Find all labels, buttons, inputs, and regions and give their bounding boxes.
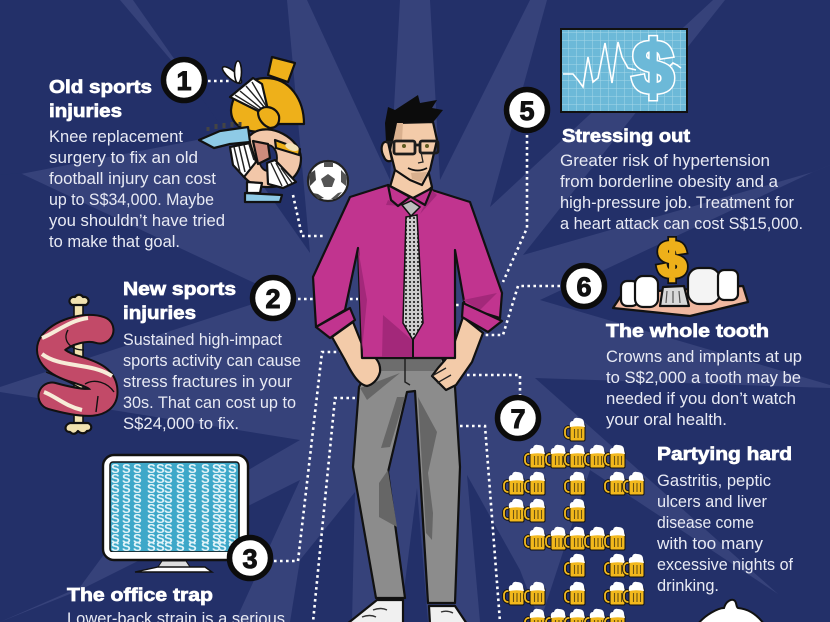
neck bbox=[390, 170, 432, 202]
number badge 3 bbox=[230, 538, 270, 578]
body: old sports injuries: surgery to fix an old bbox=[49, 149, 198, 167]
icon: white shape at bottom edge bbox=[698, 600, 764, 622]
number badge 6 bbox=[564, 266, 604, 306]
heading: stressing out: Stressing out bbox=[562, 126, 690, 146]
number badge 2: 2 bbox=[265, 284, 281, 314]
body: stressing out: a heart attack can cost S$15,000. bbox=[560, 215, 803, 233]
icon: computer monitor of dollar signs: SSSSSSSSSSSS bbox=[111, 461, 237, 476]
number badge 3: 3 bbox=[242, 544, 258, 574]
number badge 7: 7 bbox=[510, 404, 526, 434]
icon: computer monitor of dollar signs: SSSSSSSSSSSS bbox=[111, 471, 237, 486]
icon: computer monitor of dollar signs: SSSSSSSSSSSS bbox=[111, 511, 237, 526]
icon: computer monitor of dollar signs: SSSSSSSSSSSS bbox=[111, 491, 237, 506]
number badge 1: 1 bbox=[176, 66, 192, 96]
body: partying hard: Gastritis, peptic bbox=[657, 472, 771, 490]
text block: the whole tooth bbox=[606, 321, 802, 429]
icon: teeth with gold dollar sign bbox=[613, 232, 748, 316]
body: stressing out: high-pressure job. Treatment for bbox=[560, 194, 795, 212]
text block: old sports injuries bbox=[49, 77, 225, 251]
body: partying hard: ulcers and liver bbox=[657, 493, 767, 511]
body: stressing out: from borderline obesity and a bbox=[560, 173, 779, 191]
text block: the office trap bbox=[67, 585, 285, 622]
number badge 6: 6 bbox=[576, 272, 592, 302]
heading: the whole tooth: The whole tooth bbox=[606, 321, 769, 341]
number badge 5: 5 bbox=[519, 96, 535, 126]
body: the whole tooth: your oral health. bbox=[606, 411, 727, 429]
body: partying hard: with too many bbox=[656, 535, 764, 553]
icon: ECG screen with dollar sign: $ bbox=[632, 26, 674, 109]
head bbox=[382, 95, 443, 185]
icon: teeth with gold dollar sign: $ bbox=[658, 232, 686, 288]
body: new sports injuries: stress fractures in your bbox=[123, 373, 293, 391]
icon: teeth with gold dollar sign: $ bbox=[658, 232, 686, 288]
body: old sports injuries: Knee replacement bbox=[49, 128, 183, 146]
body: new sports injuries: Sustained high-impact bbox=[123, 331, 282, 349]
body: partying hard: drinking. bbox=[657, 577, 719, 595]
number badge 1 bbox=[164, 60, 204, 100]
body: old sports injuries: up to S$34,000. Maybe bbox=[49, 191, 214, 209]
icon: ECG screen with dollar sign: $ bbox=[632, 26, 674, 109]
icon: computer monitor of dollar signs: SSSSSSSSSSSS bbox=[111, 539, 237, 554]
man figure bbox=[313, 95, 502, 622]
text block: partying hard bbox=[656, 444, 793, 595]
body: old sports injuries: to make that goal. bbox=[49, 233, 180, 251]
number badge 5 bbox=[506, 90, 548, 130]
shirt bbox=[313, 185, 502, 358]
body: old sports injuries: football injury can cost bbox=[49, 170, 216, 188]
body: old sports injuries: you shouldn’t have tried bbox=[49, 212, 225, 230]
body: new sports injuries: 30s. That can cost up to bbox=[123, 394, 296, 412]
knee ring bbox=[232, 129, 301, 187]
icon: computer monitor of dollar signs: SSSSSSSSSSSS bbox=[111, 531, 237, 546]
collar bbox=[388, 185, 432, 206]
heading: partying hard: Partying hard bbox=[657, 444, 792, 464]
icon: computer monitor of dollar signs bbox=[103, 455, 248, 572]
heading: the office trap: The office trap bbox=[67, 585, 213, 605]
body: new sports injuries: S$24,000 to fix. bbox=[123, 415, 239, 433]
heading: old sports injuries: Old sports bbox=[49, 77, 152, 97]
heading: new sports injuries: injuries bbox=[123, 303, 196, 323]
icon: muscle and bone dollar sign bbox=[42, 295, 114, 434]
icon: ECG screen with dollar sign bbox=[561, 26, 687, 112]
number badge 7 bbox=[498, 398, 538, 438]
body: stressing out: Greater risk of hypertension bbox=[560, 152, 770, 170]
icon: injured leg forming a dollar sign bbox=[199, 57, 304, 202]
trousers bbox=[353, 358, 460, 603]
tie bbox=[402, 201, 423, 340]
heading: new sports injuries: New sports bbox=[123, 279, 236, 299]
body: partying hard: excessive nights of bbox=[657, 556, 793, 574]
dotted connector lines bbox=[208, 81, 560, 622]
forearms and hands bbox=[332, 317, 483, 390]
bone bbox=[66, 295, 91, 434]
heading: old sports injuries: injuries bbox=[49, 101, 122, 121]
icon: computer monitor of dollar signs: SSSSSSSSSSSS bbox=[111, 521, 237, 536]
icon: computer monitor of dollar signs: SSSSSSSSSSSS bbox=[111, 501, 237, 516]
number badge 2 bbox=[252, 278, 294, 318]
icon: computer monitor of dollar signs: SSSSSSSSSSSS bbox=[111, 481, 237, 496]
body: the whole tooth: Crowns and implants at up bbox=[606, 348, 802, 366]
body: the whole tooth: needed if you don’t watch bbox=[606, 390, 796, 408]
icon: beer mugs forming a dollar sign bbox=[504, 418, 644, 622]
shoes bbox=[347, 600, 467, 622]
body: new sports injuries: sports activity can cause bbox=[123, 352, 301, 370]
body: partying hard: disease come bbox=[657, 514, 754, 532]
icon: football bbox=[308, 161, 348, 201]
text block: stressing out bbox=[560, 126, 803, 233]
text block: new sports injuries bbox=[123, 279, 301, 433]
body: the whole tooth: to S$2,000 a tooth may be bbox=[606, 369, 801, 387]
